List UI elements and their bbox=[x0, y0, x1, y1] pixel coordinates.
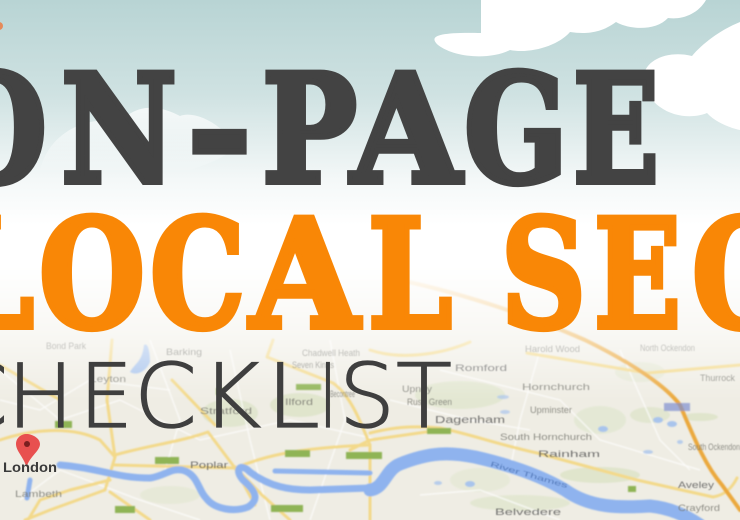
map: place labels: Crayford bbox=[678, 503, 720, 513]
title line: LOCAL SEO bbox=[0, 187, 740, 363]
subtitle: CHECKLIST: E bbox=[79, 345, 133, 448]
map: place labels: Thurrock bbox=[700, 373, 735, 383]
cloud: faded behind title bbox=[40, 108, 236, 170]
map label: London: London bbox=[3, 459, 57, 475]
map: place labels: Poplar bbox=[190, 460, 228, 470]
map background bbox=[0, 280, 740, 520]
map: place labels: Hornchurch bbox=[522, 382, 590, 392]
subtitle: CHECKLIST: T bbox=[396, 345, 452, 448]
map: parks bbox=[140, 362, 718, 511]
cloud: right edge bbox=[644, 22, 740, 130]
map: place labels: Upney bbox=[402, 384, 433, 394]
title line: LOCAL SEO: O bbox=[39, 187, 145, 363]
title line: ON-PAGE: E bbox=[573, 42, 659, 218]
sky background bbox=[0, 0, 740, 225]
map: place labels: Leyton bbox=[90, 374, 126, 384]
map: place labels: Romford bbox=[455, 363, 507, 373]
map: place labels: Aveley bbox=[678, 480, 715, 490]
subtitle: CHECKLIST: I bbox=[319, 345, 337, 448]
map: lakes bbox=[130, 344, 683, 487]
map: place labels: North Ockendon bbox=[640, 343, 695, 353]
icon: red fragment at left edge bbox=[0, 22, 3, 30]
map: place labels: Lambeth bbox=[15, 489, 62, 499]
title line: LOCAL SEO: E bbox=[594, 187, 681, 363]
title line: ON-PAGE: N bbox=[61, 42, 177, 218]
map: place labels: Seven Kings bbox=[292, 360, 334, 370]
map: yellow roads bbox=[0, 340, 740, 520]
title line: LOCAL SEO: S bbox=[501, 187, 586, 363]
map: place labels: Belvedere bbox=[495, 507, 561, 517]
map: place labels: Becontree bbox=[330, 389, 355, 399]
title line: ON-PAGE: A bbox=[349, 42, 463, 218]
map: place labels: Upminster bbox=[530, 405, 572, 415]
subtitle: CHECKLIST: S bbox=[339, 345, 395, 448]
map: place labels: Barking bbox=[166, 347, 202, 357]
subtitle: CHECKLIST: K bbox=[201, 345, 261, 448]
title line: ON-PAGE: G bbox=[464, 42, 568, 218]
cloud: top right bbox=[434, 0, 706, 56]
map: place labels: Ilford bbox=[285, 397, 313, 407]
map: place labels: Stratford bbox=[200, 406, 252, 416]
subtitle: CHECKLIST: H bbox=[7, 345, 74, 448]
map: River Thames bbox=[27, 454, 700, 520]
title line: LOCAL SEO: C bbox=[150, 187, 245, 363]
map: place labels: Chadwell Heath bbox=[302, 348, 360, 358]
map: place labels: Rainham bbox=[538, 449, 600, 459]
title line: ON-PAGE: - bbox=[187, 42, 252, 218]
map: place labels: Rush Green bbox=[407, 397, 452, 407]
subtitle: CHECKLIST: C bbox=[134, 345, 197, 448]
map pin: London bbox=[16, 434, 40, 467]
map: minor streets bbox=[0, 340, 700, 520]
title line: LOCAL SEO: A bbox=[248, 187, 361, 363]
map: place labels: Dagenham bbox=[435, 415, 505, 426]
subtitle: CHECKLIST: L bbox=[266, 345, 320, 448]
map: place labels: Bond Park bbox=[46, 341, 86, 351]
map: road badges bbox=[55, 384, 636, 513]
map: M25 motorway bbox=[400, 280, 740, 510]
subtitle: CHECKLIST bbox=[0, 345, 452, 448]
map: place labels: South Hornchurch bbox=[500, 432, 592, 442]
map: place labels: River Thames bbox=[489, 461, 569, 490]
map: place labels: Harold Wood bbox=[525, 344, 580, 354]
title line: LOCAL SEO: L bbox=[368, 187, 452, 363]
title line: ON-PAGE: P bbox=[262, 42, 357, 218]
map: place labels bbox=[15, 341, 740, 517]
title line: ON-PAGE bbox=[0, 42, 659, 218]
